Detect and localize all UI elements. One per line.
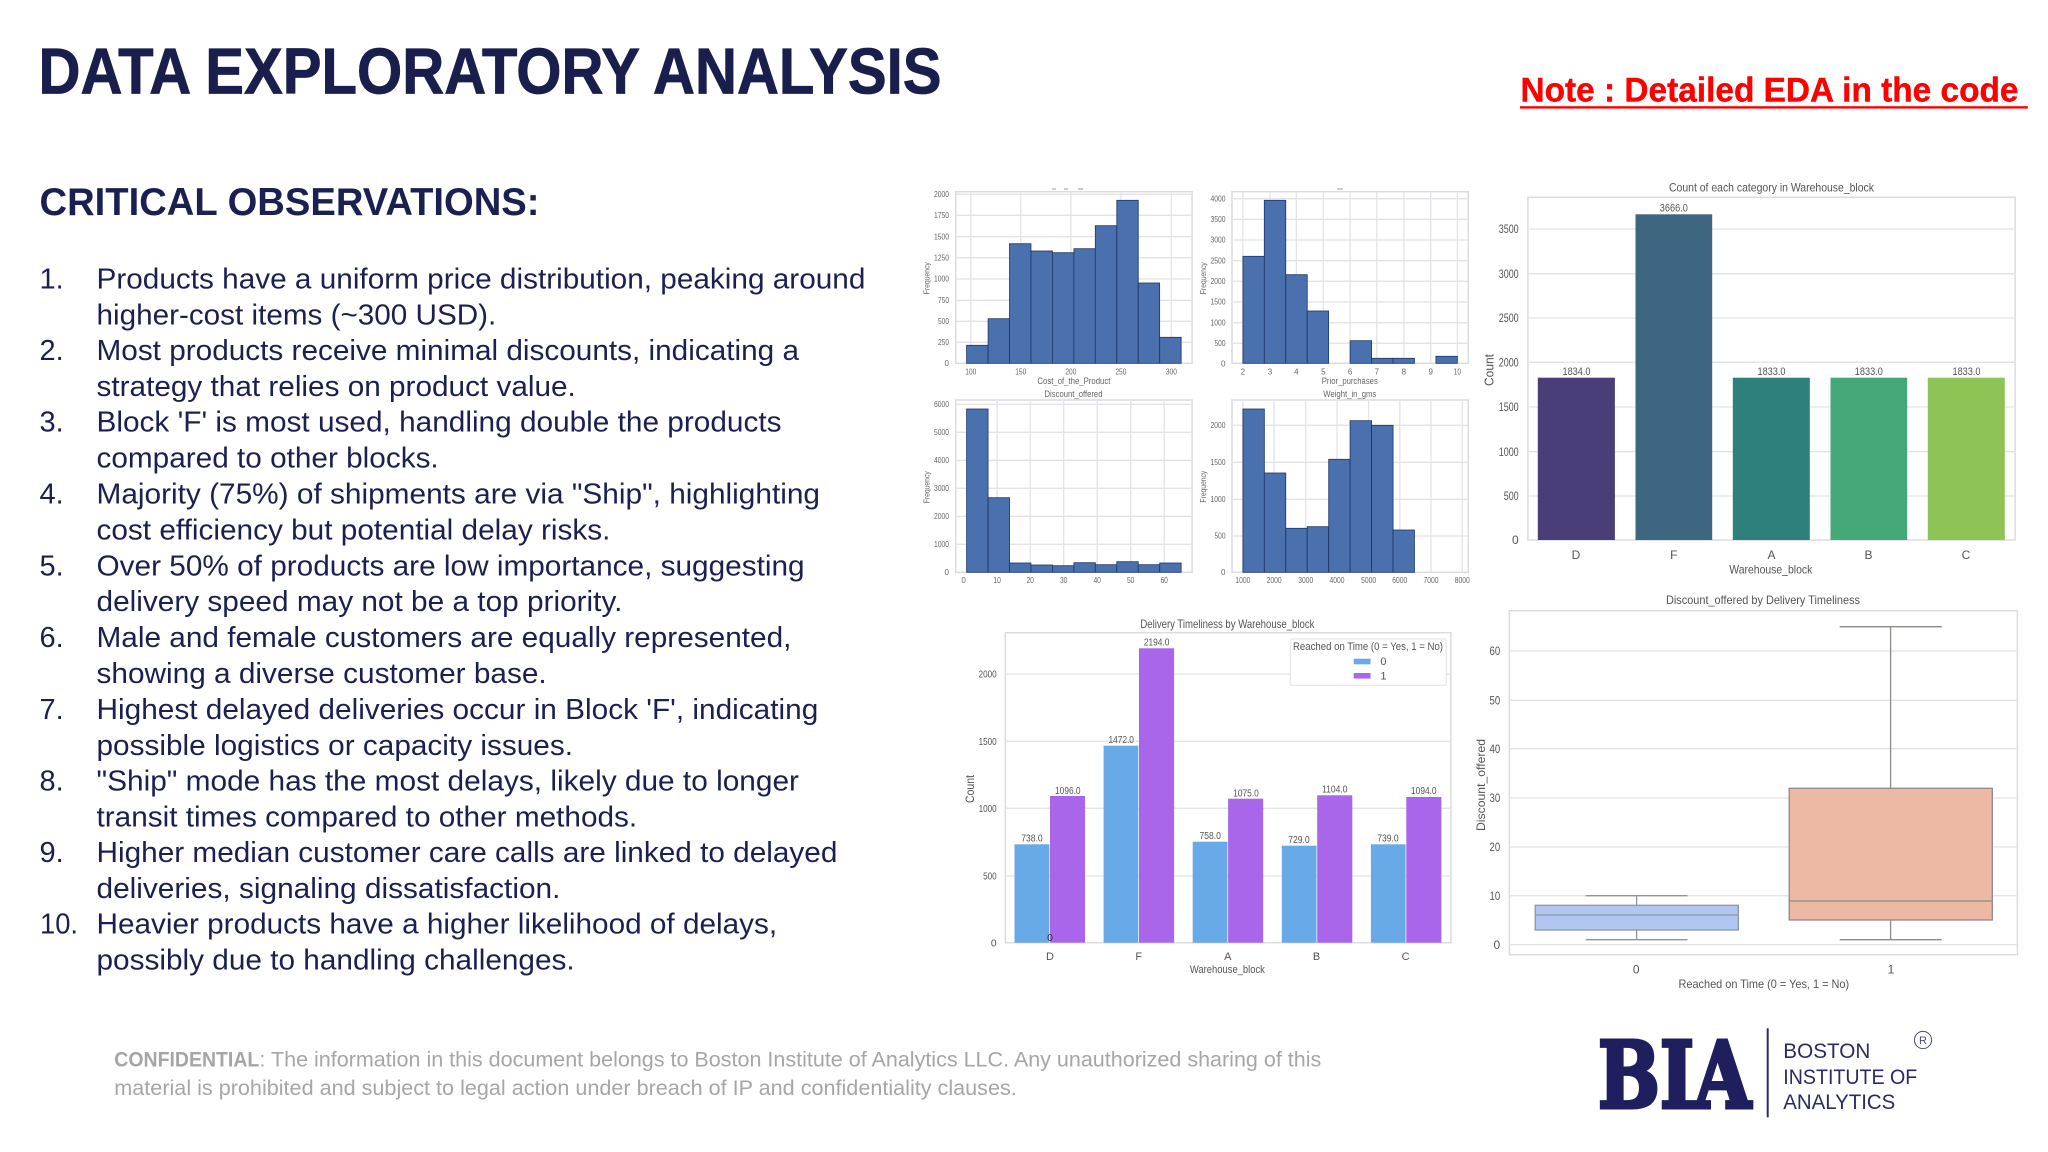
observation 4: 4. — [40, 478, 64, 510]
chart: histogram Discount_offered: 6000 — [934, 400, 949, 409]
chart: histogram Prior_purchases — [1199, 189, 1468, 386]
observation 4 — [40, 478, 820, 546]
chart: histogram Discount_offered: Frequency — [922, 471, 932, 503]
chart: delivery timeliness by Warehouse_block: Warehouse_block — [1190, 964, 1265, 976]
chart: histogram Weight_in_gms: 3000 — [1298, 576, 1314, 585]
chart: boxplot discount offered by delivery timeliness: Discount_offered — [1474, 739, 1488, 831]
chart: count of each category in Warehouse_block: 2000 — [1499, 356, 1519, 370]
chart: histogram Weight_in_gms: 5000 — [1361, 576, 1377, 585]
chart: histogram Discount_offered: 4000 — [934, 456, 949, 465]
legend: 0 — [1380, 656, 1387, 668]
chart: delivery timeliness by Warehouse_block: 0 — [1047, 933, 1053, 944]
observation 1: higher-cost items (~300 USD). — [96, 299, 496, 331]
chart: histogram Discount_offered: Discount_offered — [1044, 389, 1102, 399]
chart: histogram Cost_of_the_Product: 250 — [1115, 367, 1127, 376]
chart: delivery timeliness by Warehouse_block: D — [1046, 951, 1054, 963]
observation 3: Block 'F' is most used, handling double the products — [96, 407, 782, 439]
chart: histogram Prior_purchases: 2 — [1241, 367, 1246, 376]
chart: histogram Prior_purchases: Prior_purchases — [1322, 376, 1378, 386]
observation 9: deliveries, signaling dissatisfaction. — [96, 873, 560, 905]
chart: histogram Weight_in_gms: 7000 — [1424, 576, 1439, 585]
chart: delivery timeliness by Warehouse_block: Count — [963, 774, 977, 803]
chart: delivery timeliness by Warehouse_block: Delivery Timeliness by Warehouse_block — [1140, 617, 1315, 631]
chart: delivery timeliness by Warehouse_block: 729.0 — [1288, 835, 1310, 846]
observation 10: possibly due to handling challenges. — [96, 944, 575, 976]
chart: histogram Prior_purchases: 2000 — [1210, 277, 1226, 286]
chart: count of each category in Warehouse_block: 3000 — [1499, 267, 1519, 281]
chart: boxplot discount offered by delivery timeliness: 50 — [1490, 694, 1500, 708]
observation 6: 6. — [40, 622, 64, 654]
chart: histogram Weight_in_gms: 6000 — [1392, 576, 1408, 585]
chart: boxplot discount offered by delivery timeliness: Discount_offered by Delivery Timeliness — [1666, 593, 1860, 607]
legend: 1 — [1380, 671, 1387, 683]
observation 3: compared to other blocks. — [96, 443, 439, 475]
chart: histogram Discount_offered: 3000 — [934, 484, 949, 493]
chart: count of each category in Warehouse_block — [1482, 180, 2015, 576]
chart: boxplot discount offered by delivery timeliness: 10 — [1490, 889, 1500, 903]
chart: count of each category in Warehouse_block: 1833.0 — [1758, 366, 1786, 378]
chart: boxplot discount offered by delivery timeliness: 20 — [1490, 840, 1500, 854]
observation 6: showing a diverse customer base. — [96, 658, 547, 690]
title: DATA EXPLORATORY ANALYSIS — [38, 34, 942, 107]
registered mark — [1914, 1031, 1932, 1049]
observation 2: strategy that relies on product value. — [96, 371, 576, 403]
chart: histogram Cost_of_the_Product: 300 — [1166, 367, 1177, 376]
legend — [1290, 639, 1446, 685]
chart: delivery timeliness by Warehouse_block: 1096.0 — [1055, 786, 1081, 797]
chart: boxplot discount offered by delivery timeliness: 0 — [1633, 962, 1640, 976]
chart: delivery timeliness by Warehouse_block: 1075.0 — [1233, 789, 1259, 800]
chart: delivery timeliness by Warehouse_block: 0 — [991, 938, 997, 949]
chart: count of each category in Warehouse_block: B — [1864, 548, 1873, 562]
chart: histogram Weight_in_gms: 1500 — [1210, 458, 1226, 467]
chart: histogram Discount_offered: 0 — [961, 576, 966, 585]
logo: Boston Institute of Analytics — [1598, 1022, 1932, 1130]
chart: histogram Weight_in_gms: 2000 — [1267, 576, 1282, 585]
chart: count of each category in Warehouse_block: 1500 — [1499, 400, 1519, 414]
observation 6: Male and female customers are equally represented, — [96, 622, 791, 654]
logo wordmark: BOSTON — [1783, 1039, 1870, 1063]
chart: delivery timeliness by Warehouse_block: C — [1402, 951, 1410, 963]
chart: count of each category in Warehouse_block: D — [1572, 548, 1581, 562]
chart: histogram Prior_purchases: 2500 — [1210, 256, 1226, 265]
observation 2 — [40, 335, 800, 403]
chart: histogram Cost_of_the_Product: 1500 — [934, 232, 949, 241]
observation 3 — [40, 407, 782, 475]
observation 8: transit times compared to other methods. — [96, 801, 637, 833]
chart: histogram Cost_of_the_Product: 250 — [938, 338, 949, 347]
chart: histogram Discount_offered — [922, 389, 1192, 585]
heading: critical observations: CRITICAL OBSERVATIONS: — [40, 181, 540, 224]
chart: histogram Discount_offered: 2000 — [934, 512, 949, 521]
chart: boxplot discount offered by delivery timeliness: 40 — [1490, 742, 1500, 756]
chart: histogram Weight_in_gms: Frequency — [1199, 471, 1208, 503]
chart: histogram Discount_offered: 30 — [1060, 576, 1068, 585]
chart: histogram Weight_in_gms: 1000 — [1235, 576, 1251, 585]
chart: histogram Prior_purchases: 3000 — [1210, 236, 1226, 245]
chart: boxplot discount offered by delivery timeliness: 0 — [1494, 938, 1501, 952]
chart: count of each category in Warehouse_block: 3666.0 — [1660, 202, 1688, 214]
chart: delivery timeliness by Warehouse_block — [963, 617, 1451, 976]
chart: histogram Discount_offered: 50 — [1127, 576, 1135, 585]
confidentiality notice: : The information in this document belongs to Boston Institute of Analytics LLC. Any unauthorized sharing of this — [259, 1049, 1321, 1072]
chart: delivery timeliness by Warehouse_block: 2194.0 — [1144, 638, 1170, 649]
logo wordmark: ANALYTICS — [1783, 1090, 1895, 1114]
logo wordmark — [1783, 1039, 1917, 1114]
chart: histogram Cost_of_the_Product: 2000 — [934, 190, 949, 199]
chart: delivery timeliness by Warehouse_block: A — [1224, 951, 1232, 963]
chart: histogram Prior_purchases: 4 — [1294, 367, 1299, 376]
chart: histogram Cost_of_the_Product — [922, 189, 1192, 386]
confidentiality notice: material is prohibited and subject to legal action under breach of IP and confidentiality clauses. — [114, 1077, 1017, 1100]
observation 8: 8. — [40, 766, 64, 798]
chart: boxplot discount offered by delivery timeliness: Reached on Time (0 = Yes, 1 = No) — [1678, 977, 1849, 991]
observation 6 — [40, 622, 791, 690]
chart: histogram Weight_in_gms: 1000 — [1210, 495, 1226, 504]
chart: count of each category in Warehouse_block: C — [1962, 548, 1971, 562]
observation 7: possible logistics or capacity issues. — [96, 730, 573, 762]
chart: histogram Discount_offered: 1000 — [934, 540, 949, 549]
chart: histogram Weight_in_gms — [1199, 389, 1470, 585]
chart: delivery timeliness by Warehouse_block: 1000 — [979, 804, 997, 815]
chart: histogram Discount_offered: 60 — [1160, 576, 1168, 585]
observation 1 — [40, 264, 865, 331]
observation 7 — [40, 694, 818, 762]
chart: histogram Weight_in_gms: 4000 — [1330, 576, 1345, 585]
chart: histogram Cost_of_the_Product: 0 — [945, 359, 950, 368]
chart: count of each category in Warehouse_block: Warehouse_block — [1729, 562, 1813, 576]
chart: delivery timeliness by Warehouse_block: 2000 — [979, 670, 997, 681]
chart: count of each category in Warehouse_block: 1833.0 — [1952, 366, 1980, 378]
chart: histogram Discount_offered: 0 — [945, 568, 950, 577]
observation 3: 3. — [40, 407, 64, 439]
chart: count of each category in Warehouse_block: A — [1767, 548, 1776, 562]
observation 10 — [40, 909, 777, 976]
chart: count of each category in Warehouse_block: 2500 — [1499, 311, 1519, 325]
chart: boxplot discount offered by delivery timeliness: 30 — [1490, 791, 1500, 805]
observation 9: 9. — [40, 837, 64, 869]
chart: delivery timeliness by Warehouse_block: 1472.0 — [1108, 735, 1134, 746]
chart: histogram Cost_of_the_Product: 750 — [938, 296, 949, 305]
observation 2: 2. — [40, 335, 64, 367]
chart: delivery timeliness by Warehouse_block: 758.0 — [1200, 831, 1221, 842]
legend: Reached on Time (0 = Yes, 1 = No) — [1293, 641, 1443, 653]
observation 1: 1. — [40, 264, 64, 296]
chart: histogram Prior_purchases: 10 — [1454, 367, 1462, 376]
chart: count of each category in Warehouse_block: 500 — [1504, 489, 1519, 503]
chart: count of each category in Warehouse_block: 1000 — [1499, 445, 1519, 459]
chart: histogram Prior_purchases: 3 — [1268, 367, 1273, 376]
observation 5: 5. — [40, 550, 64, 582]
chart: boxplot discount offered by delivery timeliness: 60 — [1490, 644, 1500, 658]
chart: delivery timeliness by Warehouse_block: 1104.0 — [1322, 785, 1348, 796]
chart: histogram Prior_purchases: 500 — [1214, 339, 1226, 348]
chart: count of each category in Warehouse_block: 1833.0 — [1855, 366, 1883, 378]
chart: histogram Weight_in_gms: 0 — [1221, 568, 1226, 577]
chart: count of each category in Warehouse_block: Count — [1482, 354, 1496, 386]
chart: histogram Weight_in_gms: Weight_in_gms — [1323, 389, 1377, 399]
chart: histogram Cost_of_the_Product: 100 — [965, 367, 977, 376]
chart: histogram Cost_of_the_Product: 1250 — [934, 253, 949, 262]
chart: histogram Prior_purchases: 3500 — [1210, 215, 1226, 224]
box: delayed — [1789, 627, 1992, 940]
confidentiality notice: CONFIDENTIAL — [114, 1049, 259, 1072]
chart: histogram Weight_in_gms: 2000 — [1210, 421, 1226, 430]
observation 4: cost efficiency but potential delay risks. — [96, 514, 610, 546]
observation 9: Higher median customer care calls are linked to delayed — [96, 837, 837, 869]
observation 10: Heavier products have a higher likelihood of delays, — [96, 909, 777, 941]
chart: count of each category in Warehouse_block: 0 — [1512, 533, 1519, 547]
chart: histogram Weight_in_gms: 500 — [1214, 532, 1226, 541]
chart: histogram Cost_of_the_Product: 1750 — [934, 211, 949, 220]
chart: count of each category in Warehouse_block: F — [1670, 548, 1677, 562]
chart: delivery timeliness by Warehouse_block: 739.0 — [1377, 834, 1399, 845]
chart: histogram Cost_of_the_Product: Cost_of_the_Product — [1037, 376, 1111, 386]
observation 5 — [40, 550, 805, 618]
observation 1: Products have a uniform price distribution, peaking around — [96, 264, 865, 296]
observation 8: "Ship" mode has the most delays, likely due to longer — [96, 766, 799, 798]
observation 5: delivery speed may not be a top priority. — [96, 586, 622, 618]
chart: histogram Prior_purchases: Frequency — [1199, 262, 1208, 294]
chart: histogram Cost_of_the_Product: 150 — [1015, 367, 1027, 376]
chart: histogram Prior_purchases: 9 — [1428, 367, 1433, 376]
logo mark: BIA — [1598, 1022, 1752, 1130]
confidentiality notice — [114, 1049, 1321, 1100]
chart: histogram Prior_purchases: 5 — [1321, 367, 1326, 376]
box: on time — [1535, 896, 1738, 940]
chart: histogram Prior_purchases: 8 — [1402, 367, 1407, 376]
chart: delivery timeliness by Warehouse_block: F — [1135, 951, 1142, 963]
note callout: Note : Detailed EDA in the code — [1520, 72, 2018, 110]
registered mark: R — [1919, 1035, 1927, 1047]
observation 9 — [40, 837, 837, 905]
chart: delivery timeliness by Warehouse_block: 1500 — [979, 737, 997, 748]
chart: boxplot discount offered by delivery timeliness: 1 — [1888, 962, 1895, 976]
chart: histogram Prior_purchases: 4000 — [1210, 194, 1226, 203]
chart: histogram Cost_of_the_Product: 500 — [938, 317, 949, 326]
chart: delivery timeliness by Warehouse_block: 1094.0 — [1411, 786, 1437, 797]
chart: delivery timeliness by Warehouse_block: B — [1313, 951, 1320, 963]
chart: histogram Discount_offered: 20 — [1026, 576, 1034, 585]
observation 8 — [40, 766, 799, 833]
chart: histogram Prior_purchases: 1000 — [1210, 318, 1226, 327]
chart: histogram Weight_in_gms: 8000 — [1455, 576, 1470, 585]
observation 4: Majority (75%) of shipments are via "Ship", highlighting — [96, 478, 820, 510]
logo wordmark: INSTITUTE OF — [1783, 1065, 1917, 1089]
chart: histogram Prior_purchases: 7 — [1375, 367, 1380, 376]
chart: histogram Prior_purchases: 6 — [1348, 367, 1353, 376]
observation 2: Most products receive minimal discounts, indicating a — [96, 335, 800, 367]
chart: delivery timeliness by Warehouse_block: 738.0 — [1021, 834, 1043, 845]
chart: histogram Cost_of_the_Product: Frequency — [922, 262, 932, 294]
chart: histogram Prior_purchases: 1500 — [1210, 298, 1226, 307]
chart: histogram Cost_of_the_Product: 1000 — [934, 275, 949, 284]
chart: histogram Cost_of_the_Product: 200 — [1065, 367, 1077, 376]
observation 5: Over 50% of products are low importance, suggesting — [96, 550, 805, 582]
text block: observations list — [40, 264, 865, 976]
observation 7: 7. — [40, 694, 64, 726]
chart: count of each category in Warehouse_block: 3500 — [1499, 222, 1519, 236]
chart: boxplot discount offered by delivery timeliness — [1474, 593, 2017, 991]
chart: histogram Prior_purchases: 0 — [1221, 359, 1226, 368]
chart: histogram Discount_offered: 10 — [993, 576, 1001, 585]
chart: histogram Discount_offered: 40 — [1093, 576, 1101, 585]
chart: count of each category in Warehouse_block: Count of each category in Warehouse_block — [1669, 180, 1875, 194]
chart: histogram Discount_offered: 5000 — [934, 428, 949, 437]
observation 10: 10. — [40, 909, 78, 941]
chart: count of each category in Warehouse_block: 1834.0 — [1562, 366, 1590, 378]
chart: delivery timeliness by Warehouse_block: 500 — [983, 872, 997, 883]
observation 7: Highest delayed deliveries occur in Block 'F', indicating — [96, 694, 818, 726]
